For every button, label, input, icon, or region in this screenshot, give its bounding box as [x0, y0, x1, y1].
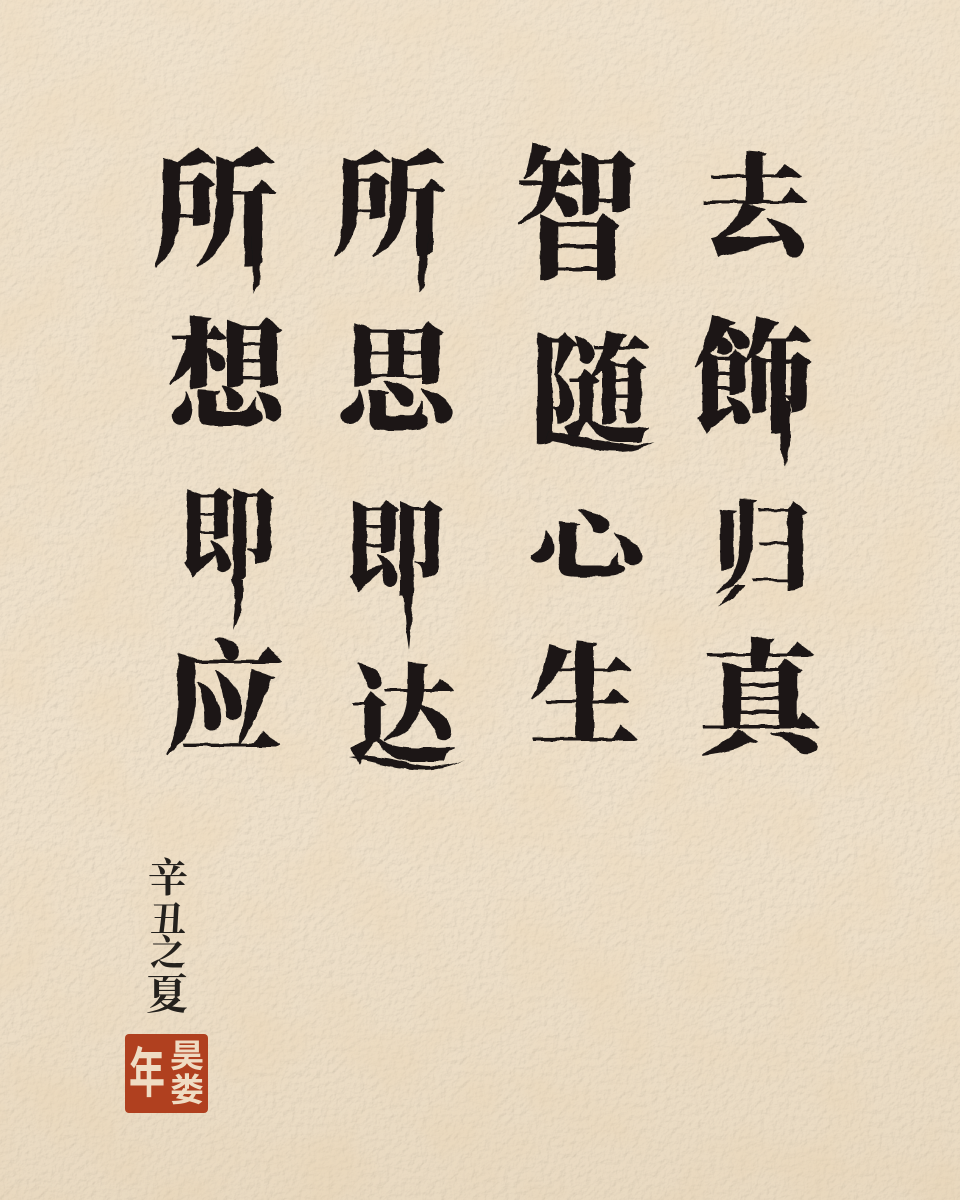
column 2: 智随心生	[514, 138, 663, 761]
column 2: 智随心生: 智	[514, 138, 638, 300]
column 1: 去飾归真: 归	[712, 494, 812, 606]
column 2: 智随心生: 心	[528, 506, 663, 590]
red seal: 年	[129, 1042, 165, 1104]
column 1: 去飾归真: 去	[699, 148, 820, 272]
column 3: 所思即达: 所	[333, 144, 447, 272]
column 1: 去飾归真	[691, 148, 843, 770]
column 2: 智随心生: 生	[529, 637, 641, 761]
column 4: 所想即应	[152, 144, 297, 770]
signature: 辛丑之夏	[146, 856, 188, 1019]
signature: 辛丑之夏: 夏	[146, 972, 188, 1019]
column 3: 所思即达: 思	[337, 316, 468, 448]
signature: 辛丑之夏: 辛	[148, 856, 188, 900]
column 3: 所思即达: 即	[344, 496, 446, 608]
signature: 辛丑之夏: 丑	[150, 900, 186, 940]
red seal	[125, 1034, 208, 1113]
poem calligraphy	[152, 138, 843, 778]
red seal: 娄	[170, 1073, 204, 1109]
column 1: 去飾归真: 飾	[691, 312, 815, 448]
column 3: 所思即达: 达	[348, 658, 465, 778]
red seal: 昊	[170, 1039, 204, 1075]
column 4: 所想即应: 即	[178, 482, 278, 594]
signature: 辛丑之夏: 之	[150, 933, 186, 973]
column 4: 所想即应: 应	[163, 636, 285, 770]
column 1: 去飾归真: 真	[698, 634, 843, 770]
column 2: 智随心生: 随	[530, 326, 650, 458]
column 3: 所思即达	[333, 144, 468, 778]
column 4: 所想即应: 所	[152, 144, 278, 284]
column 4: 所想即应: 想	[167, 312, 297, 444]
